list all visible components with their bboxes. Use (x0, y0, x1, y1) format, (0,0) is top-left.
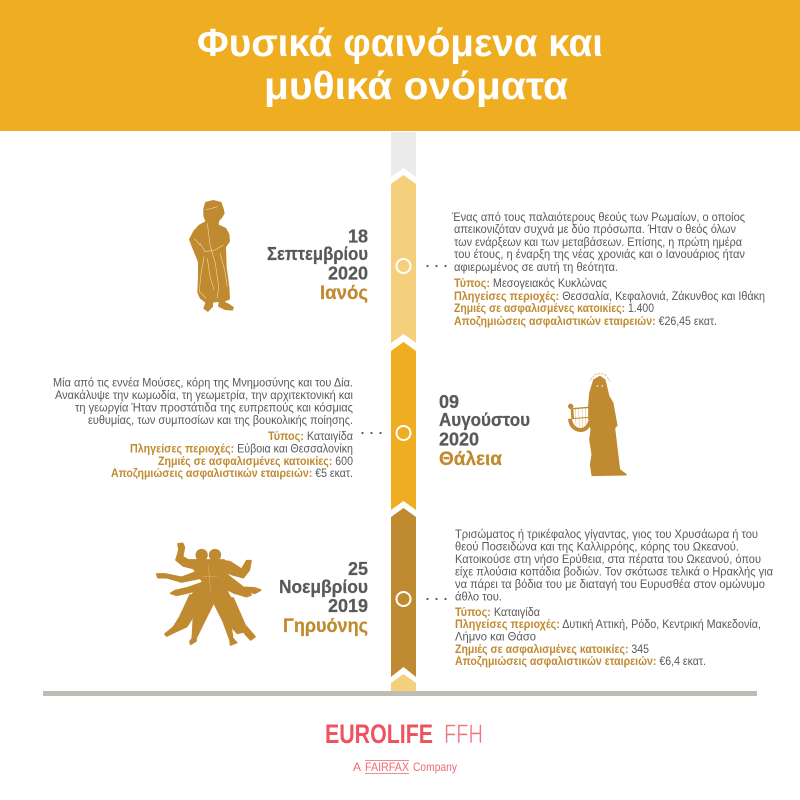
text block: Geryon: Πληγείσες περιοχές: Δυτική Αττική, Ρόδο, Κεντρική Μακεδονία, (455, 619, 761, 631)
text block: Ianos: Πληγείσες περιοχές: Θεσσαλία, Κεφαλονιά, Ζάκυνθος και Ιθάκη (454, 291, 765, 303)
date: 09 Αυγούστου 2020 Θάλεια: Αυγούστου (439, 410, 530, 430)
date: 25 Νοεμβρίου 2019 Γηρυόνης: Νοεμβρίου (279, 577, 368, 597)
text block: Thaleia: Ανακάλυψε την κωμωδία, τη γεωμετρία, την αρχιτεκτονική και (55, 390, 353, 402)
logo tagline: A Fairfax Company: A (353, 760, 361, 774)
icon: Geryon figure (157, 543, 261, 645)
text block: Thaleia (53, 378, 353, 480)
date: 18 Σεπτεμβρίου 2020 Ιανός: Ιανός (320, 283, 368, 304)
date: 09 Αυγούστου 2020 Θάλεια: 2020 (439, 430, 479, 450)
text block: Geryon: Τύπος: Καταιγίδα (455, 607, 540, 619)
text block: Ianos: Τύπος: Μεσογειακός Κυκλώνας (454, 278, 607, 290)
logo tagline: A Fairfax Company (353, 760, 457, 774)
icon: Thaleia figure with lyre (568, 373, 626, 475)
title banner: Φυσικά φαινόμενα και (197, 22, 603, 65)
title banner: μυθικά ονόματα (264, 65, 568, 108)
date: 25 Νοεμβρίου 2019 Γηρυόνης (279, 559, 368, 637)
text block: Ianos: απεικονιζόταν συχνά με δύο πρόσωπα. Ήταν ο θεός όλων (454, 224, 736, 236)
date: 18 Σεπτεμβρίου 2020 Ιανός (267, 226, 368, 304)
timeline (391, 132, 416, 691)
text block: Geryon: Αποζημιώσεις ασφαλιστικών εταιρειών: €6,4 εκατ. (455, 656, 706, 668)
date: 18 Σεπτεμβρίου 2020 Ιανός: Σεπτεμβρίου (267, 244, 368, 264)
date: 25 Νοεμβρίου 2019 Γηρυόνης: 2019 (328, 596, 368, 616)
text block: Geryon: είχε πλούσια κοπάδια βοδιών. Τον σκότωσε τελικά ο Ηρακλής για (455, 566, 773, 578)
text block: Thaleia: Ζημιές σε ασφαλισμένες κατοικίες: 600 (158, 456, 353, 468)
text block: Geryon: Λήμνο και Θάσο (455, 632, 536, 644)
text block: Thaleia: Πληγείσες περιοχές: Εύβοια και Θεσσαλονίκη (130, 444, 353, 456)
text block: Thaleia: Τύπος: Καταιγίδα (268, 431, 353, 443)
text block: Geryon (455, 529, 773, 668)
date: 18 Σεπτεμβρίου 2020 Ιανός: 18 (348, 226, 368, 246)
title banner (0, 0, 800, 131)
logo: Eurolife FFH: FFH (444, 719, 483, 749)
logo: Eurolife FFH: EUROLIFE (325, 719, 433, 749)
text block: Ianos: των ενάρξεων και των μεταβάσεων. Επίσης, η πρώτη ημέρα (454, 237, 742, 249)
date: 25 Νοεμβρίου 2019 Γηρυόνης: 25 (348, 559, 368, 579)
text block: Geryon: Τρισώματος ή τρικέφαλος γίγαντας, γιος του Χρυσάωρα ή του (455, 529, 758, 541)
text block: Geryon: άθλο του. (455, 592, 502, 604)
logo tagline: A Fairfax Company: FAIRFAX (365, 760, 409, 774)
dots connector (361, 432, 382, 434)
date: 25 Νοεμβρίου 2019 Γηρυόνης: Γηρυόνης (283, 616, 368, 637)
dots connector (426, 265, 447, 267)
text block: Ianos: Ζημιές σε ασφαλισμένες κατοικίες: 1.400 (454, 303, 654, 315)
text block: Ianos: του έτους, η έναρξη της νέας χρονιάς και ο Ιανουάριος ήταν (454, 249, 745, 261)
icon: Ianos figure (189, 200, 234, 312)
text block: Geryon: θεού Ποσειδώνα και της Καλλιρρόης, κόρης του Ωκεανού. (455, 542, 739, 554)
text block: Geryon: Ζημιές σε ασφαλισμένες κατοικίες: 345 (455, 644, 649, 656)
text block: Thaleia: ευθυμίας, των συμποσίων και της βουκολικής ποίησης. (88, 415, 353, 427)
date: 09 Αυγούστου 2020 Θάλεια (439, 392, 530, 470)
text block: Thaleia: τη γεωργία Ήταν προστάτιδα της ευπρεπούς και κόσμιας (75, 402, 353, 414)
text block: Ianos: αφιερωμένος σε αυτή τη θεότητα. (454, 262, 618, 274)
date: 09 Αυγούστου 2020 Θάλεια: Θάλεια (439, 449, 502, 470)
text block: Geryon: να πάρει τα βόδια του με διαταγή του Ευρυσθέα στον ομώνυμο (455, 579, 765, 591)
text block: Geryon: Κατοικούσε στη νήσο Ερύθεια, στα πέρατα του Ωκεανού, όπου (455, 554, 761, 566)
dots connector (426, 598, 447, 600)
logo tagline: A Fairfax Company: Company (413, 760, 457, 774)
text block: Ianos: Ένας από τους παλαιότερους θεούς των Ρωμαίων, ο οποίος (451, 212, 745, 224)
text block: Ianos (451, 212, 765, 328)
baseline bar (43, 691, 757, 696)
text block: Thaleia: Αποζημιώσεις ασφαλιστικών εταιρειών: €5 εκατ. (111, 468, 353, 480)
date: 09 Αυγούστου 2020 Θάλεια: 09 (439, 392, 459, 412)
date: 18 Σεπτεμβρίου 2020 Ιανός: 2020 (328, 264, 368, 284)
text block: Thaleia: Μία από τις εννέα Μούσες, κόρη της Μνημοσύνης και του Δία. (53, 378, 353, 390)
text block: Ianos: Αποζημιώσεις ασφαλιστικών εταιρειών: €26,45 εκατ. (454, 316, 717, 328)
